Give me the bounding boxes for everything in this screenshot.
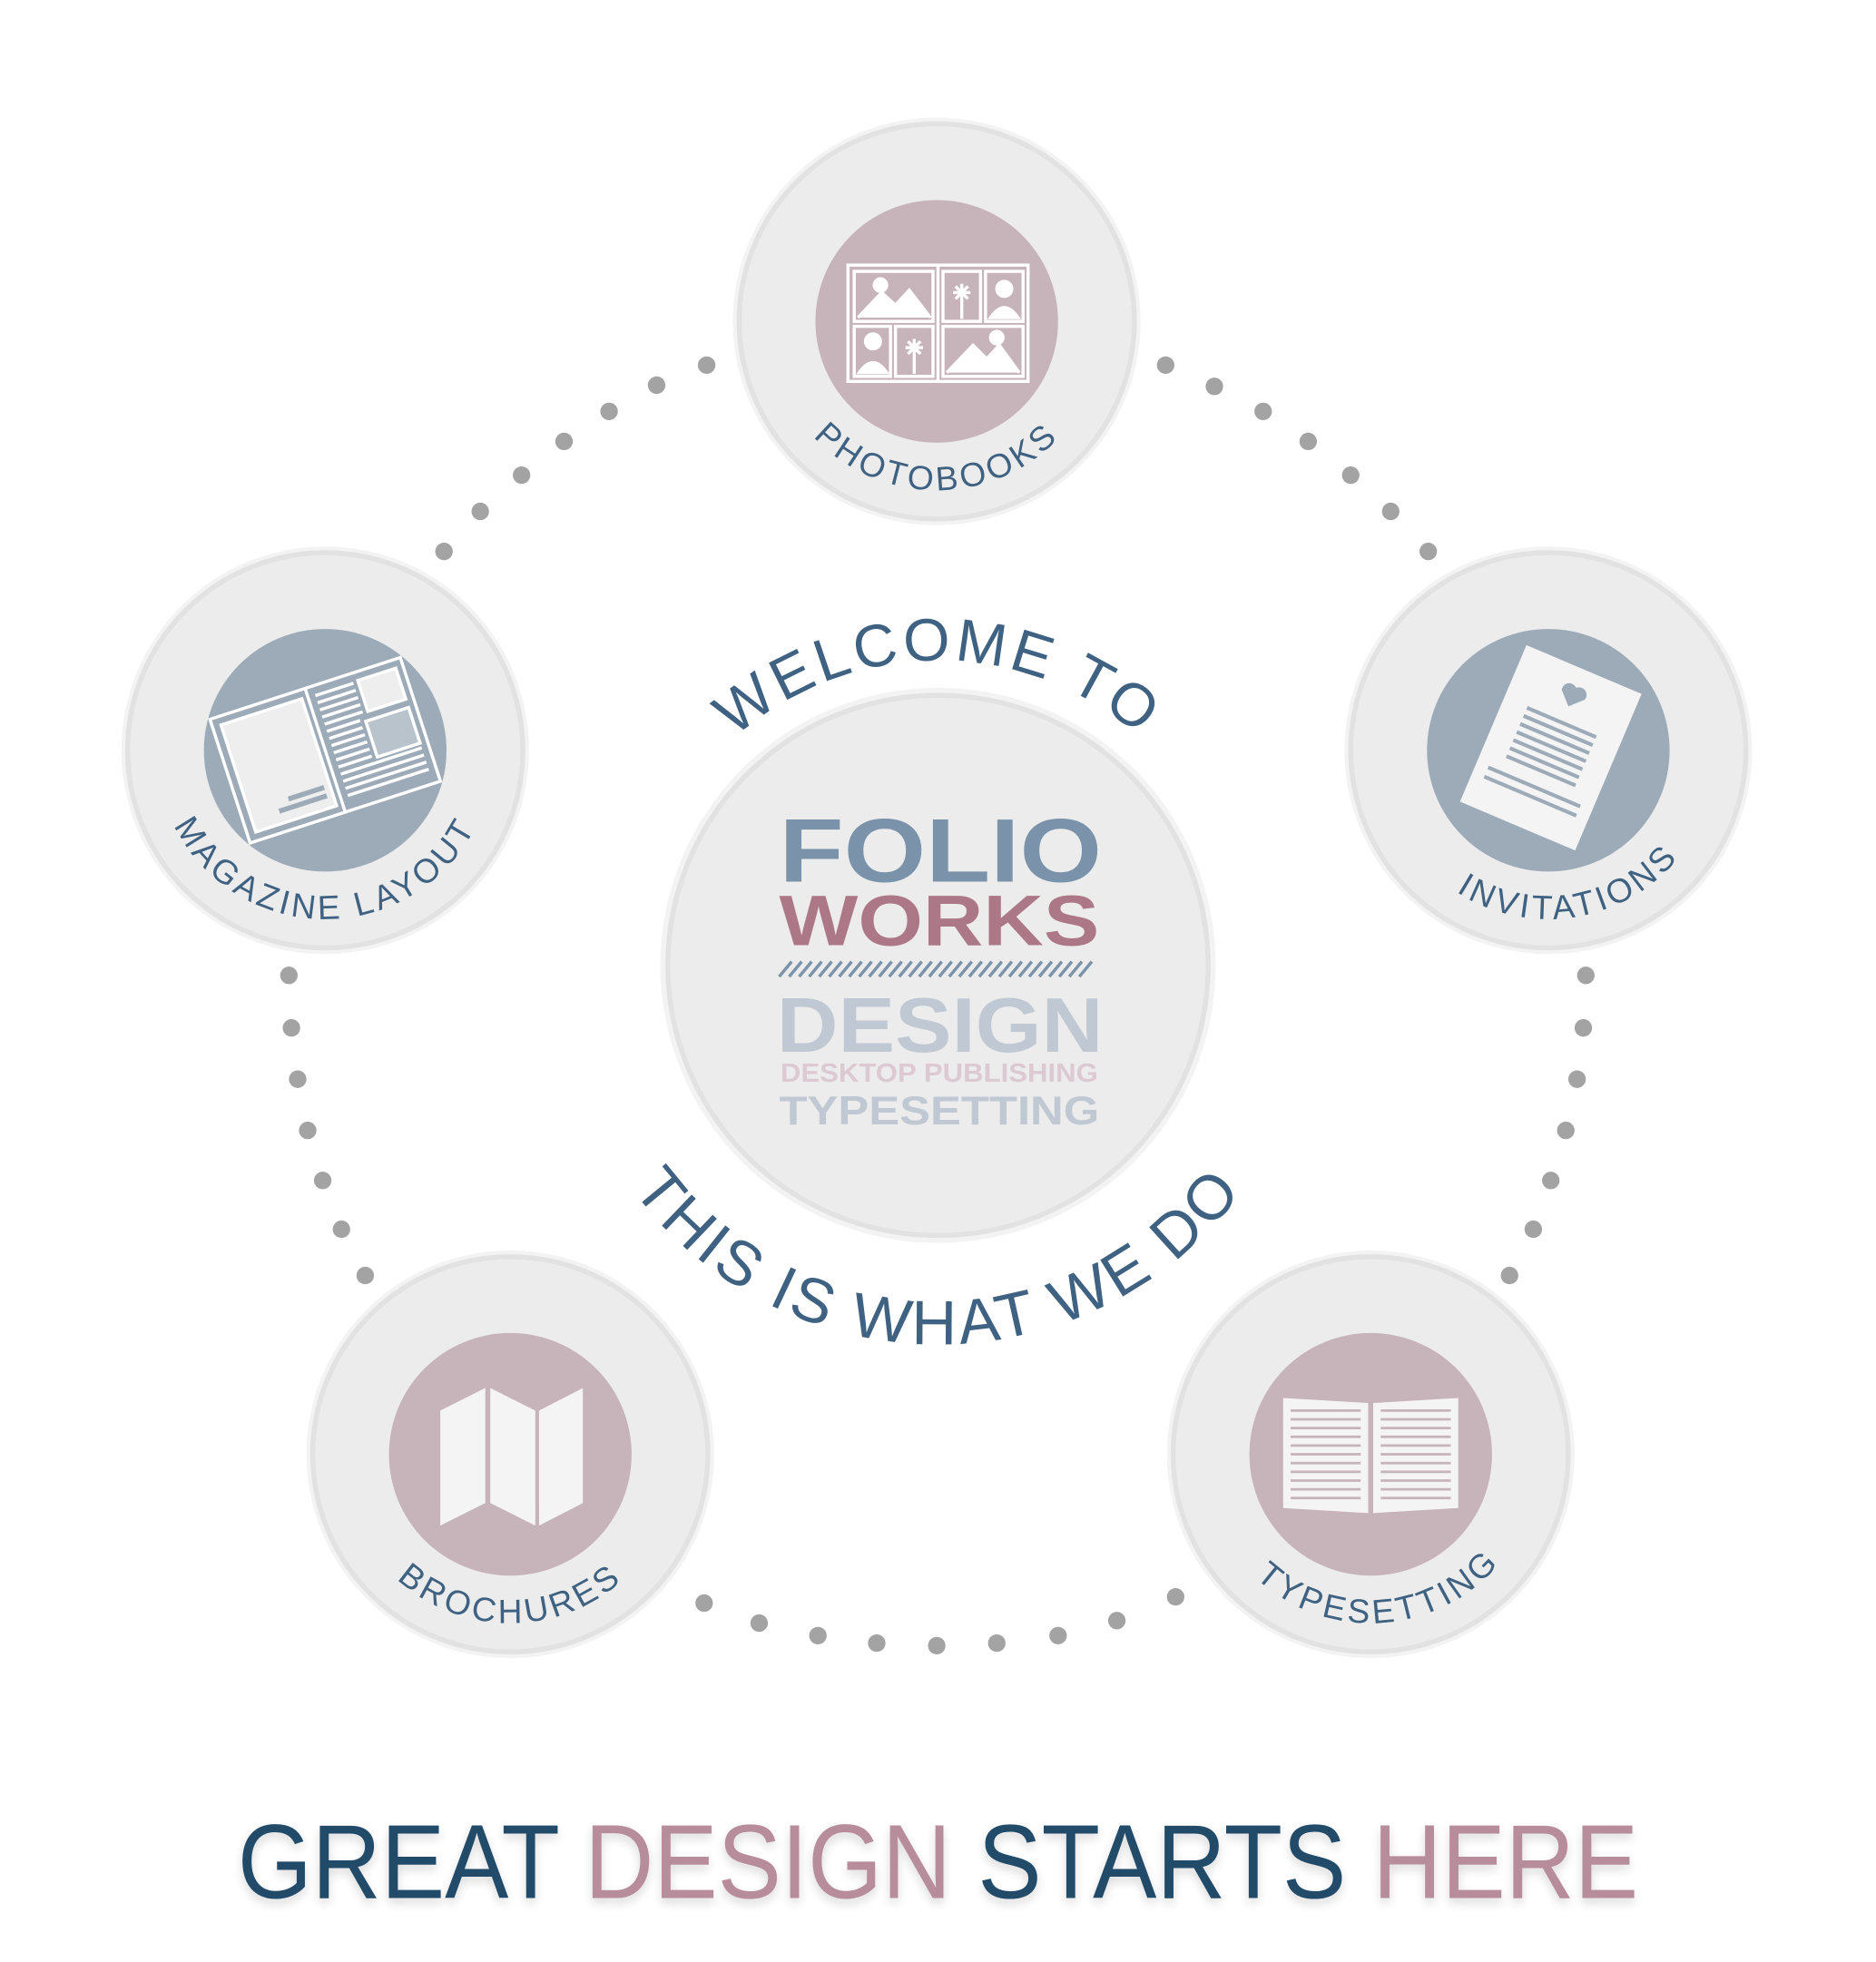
panel: magazine layout (122, 546, 529, 955)
logo text: folio: FOLIO (780, 800, 1102, 901)
label: brochures: BROCHURES (398, 1563, 617, 1624)
panel: photobooks (733, 118, 1140, 525)
icon: magazine (210, 658, 440, 843)
label: photobooks: PHOTOBOOKS (815, 421, 1055, 490)
dotted connector ring (280, 357, 1595, 1654)
logo text: design: DESIGN (777, 983, 1103, 1069)
logo text: desktop publishing: DESKTOP PUBLISHING (781, 1059, 1098, 1088)
panel: center logo (661, 688, 1215, 1243)
tagline: GREAT DESIGN STARTS HERE (238, 1803, 1638, 1921)
heading: welcome to: WELCOME TO (710, 619, 1154, 730)
logo text: typesetting: TYPESETTING (780, 1089, 1099, 1133)
hatch divider (780, 962, 1092, 976)
panel: brochures (307, 1251, 713, 1658)
icon: invitation card (1460, 645, 1642, 850)
logo text: works: WORKS (780, 881, 1099, 961)
heading: this is what we do: THIS IS WHAT WE DO (643, 1163, 1233, 1345)
icon: open book (1283, 1398, 1459, 1513)
label: typesetting: TYPESETTING (1262, 1554, 1494, 1624)
label: invitations: INVITATIONS (1459, 848, 1674, 920)
panel: invitations (1345, 546, 1752, 955)
label: magazine layout: MAGAZINE LAYOUT (174, 816, 470, 919)
panel: typesetting (1167, 1251, 1575, 1658)
icon: trifold brochure (440, 1388, 583, 1525)
icon: photobook (848, 265, 1028, 381)
